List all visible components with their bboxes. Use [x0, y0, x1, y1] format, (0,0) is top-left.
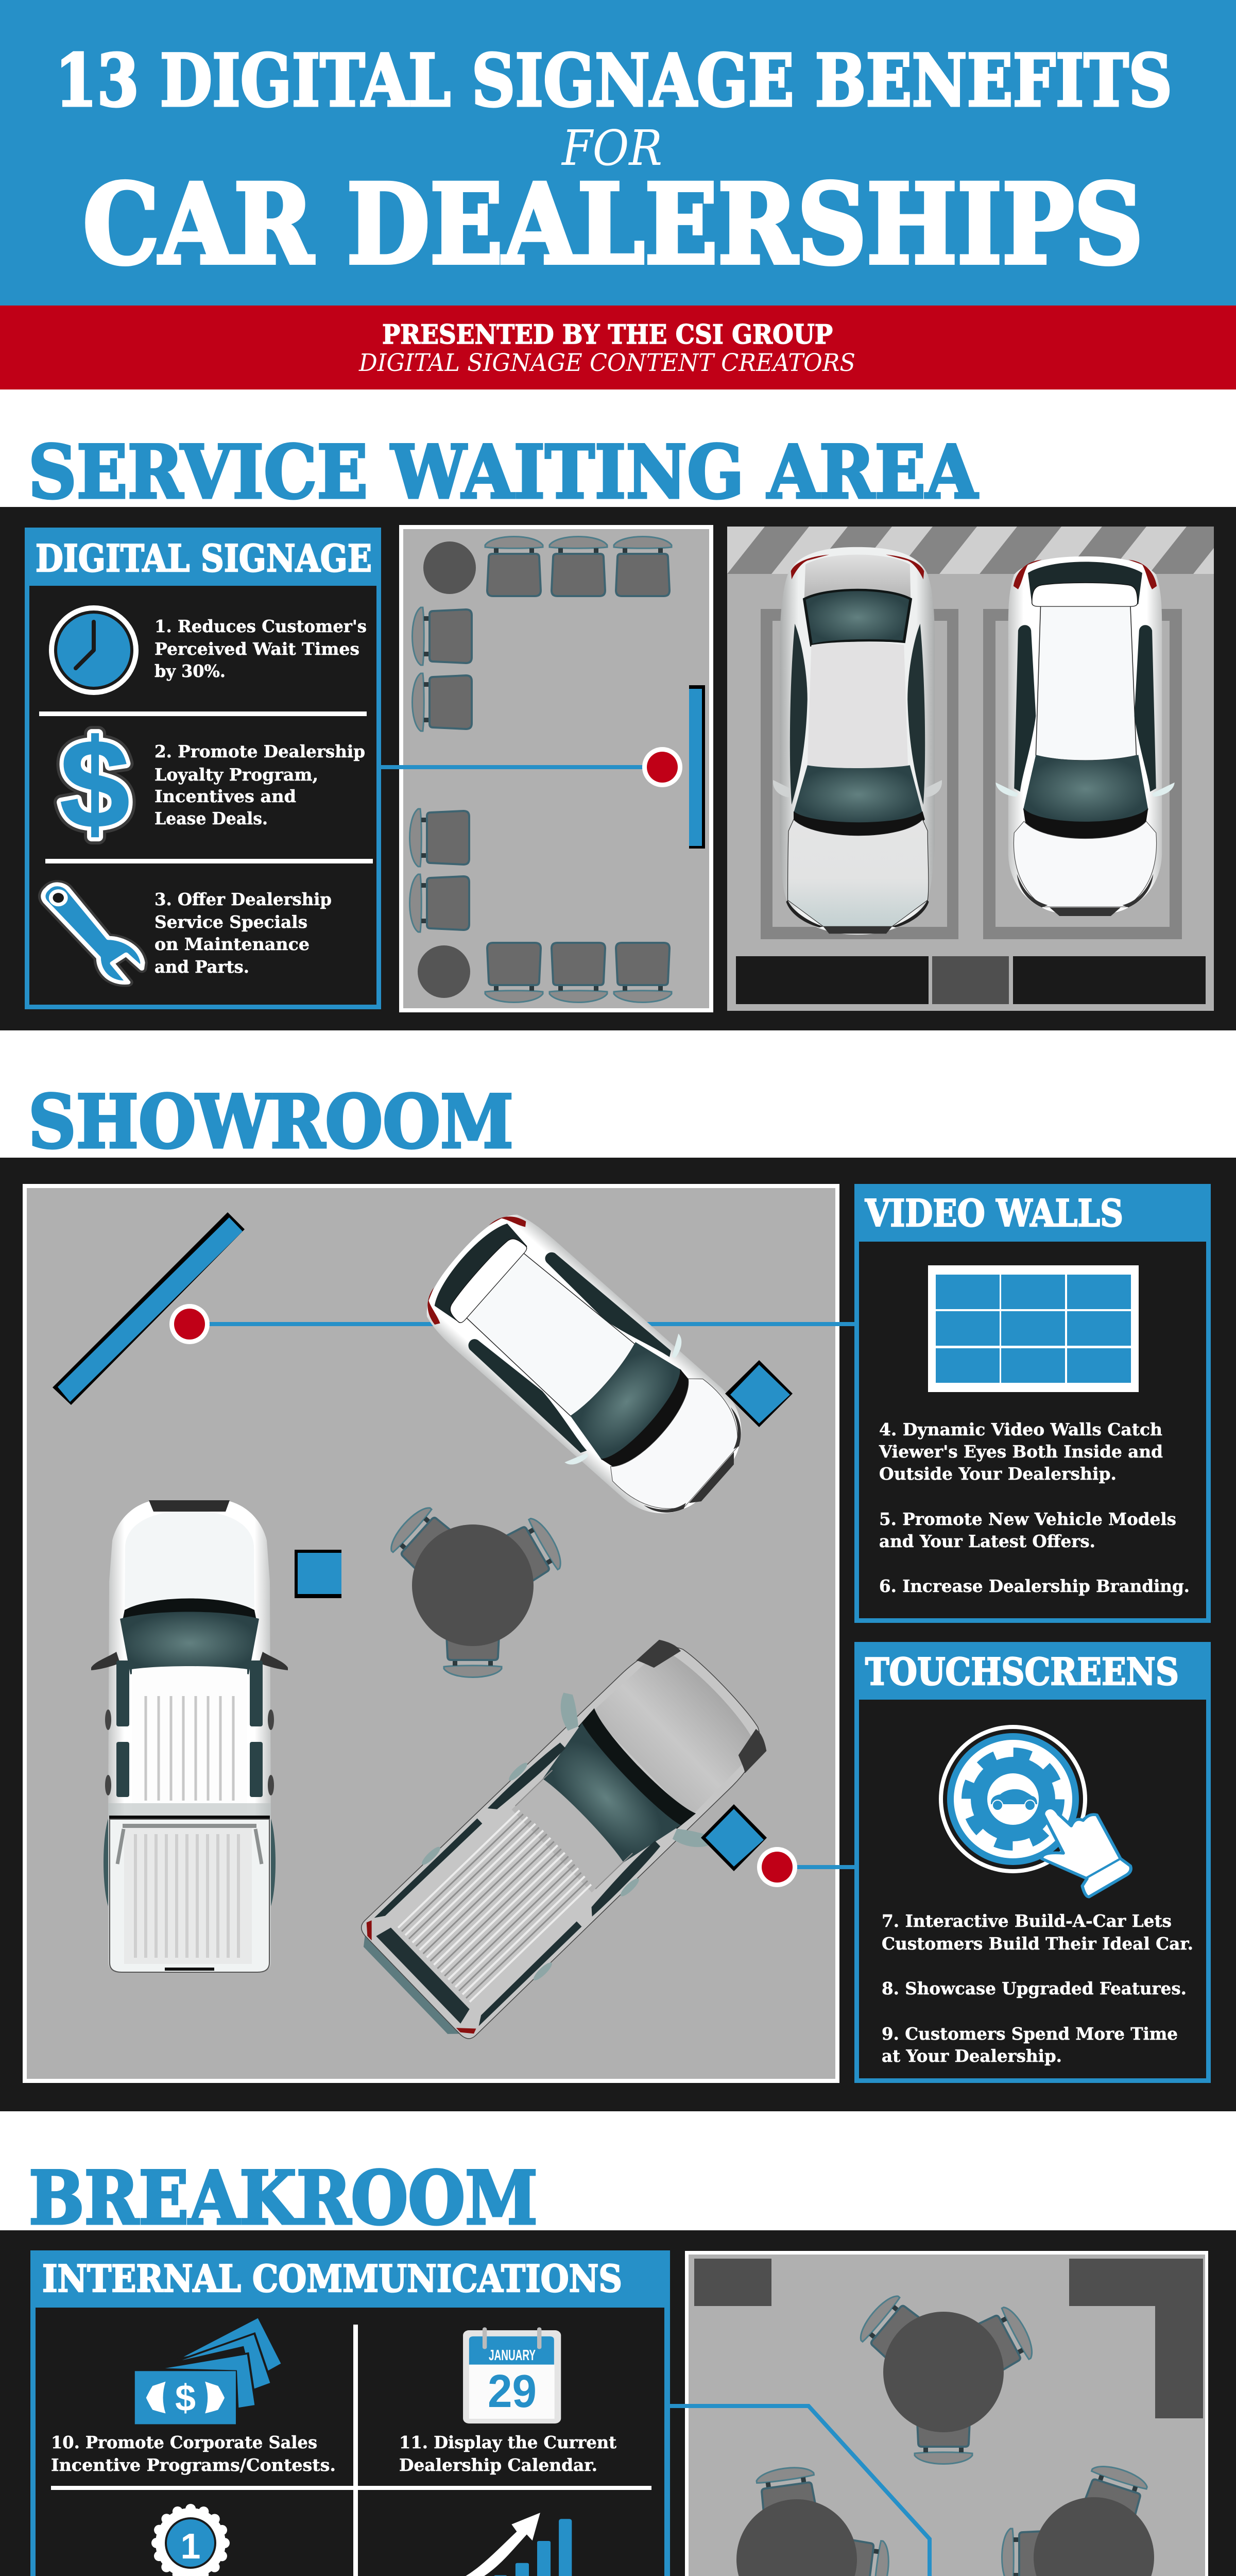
icon: calendar: JANUARY	[489, 2347, 536, 2364]
icon: dollar sign: $	[60, 713, 130, 854]
icon: calendar	[463, 2327, 561, 2424]
icon: ribbon: 1	[181, 2526, 200, 2566]
pickup truck	[91, 1500, 288, 1973]
presenter banner	[0, 306, 1236, 389]
benefit 10	[51, 2432, 336, 2475]
icon: calendar: 29	[488, 2366, 537, 2417]
benefit 1: 1. Reduces Customer's	[154, 616, 367, 636]
benefit 11: Dealership Calendar.	[399, 2455, 597, 2475]
benefit 2	[154, 741, 365, 828]
icon: ribbon	[156, 2508, 226, 2576]
location marker	[169, 1304, 210, 1344]
chairs	[410, 537, 672, 1003]
heading: showroom: SHOWROOM	[28, 1079, 513, 1165]
counter blocks	[736, 956, 1206, 1004]
benefit 11	[399, 2432, 617, 2475]
car: sedan	[773, 547, 942, 935]
benefit 7: 7. Interactive Build-A-Car Lets	[882, 1911, 1172, 1931]
benefit 2: Incentives and	[154, 786, 296, 806]
benefit 9	[882, 2024, 1178, 2066]
icon: video wall grid	[928, 1265, 1139, 1392]
table with chairs	[854, 2291, 1038, 2464]
table with chairs	[1002, 2461, 1177, 2576]
icon: dollar sign: $	[60, 713, 130, 854]
title word: for: FOR	[561, 120, 662, 177]
benefit 10: 10. Promote Corporate Sales	[51, 2432, 317, 2452]
connector line: touchscreen	[777, 1865, 854, 1869]
parking bay frames	[761, 609, 1182, 939]
icon: money	[135, 2317, 282, 2424]
connector line	[381, 765, 662, 769]
panel: parking bays	[727, 527, 1231, 1011]
heading: breakroom: BREAKROOM	[29, 2156, 538, 2241]
icon: touch gear	[939, 1725, 1131, 1897]
touchscreen kiosk	[701, 1804, 767, 1871]
icon: clock	[49, 605, 139, 695]
table with chairs	[385, 1502, 567, 1677]
location marker	[757, 1847, 797, 1887]
benefit 3: Service Specials	[154, 912, 307, 932]
corner counter	[1069, 2259, 1203, 2418]
benefit 1: Perceived Wait Times	[154, 639, 359, 659]
benefit 9: 9. Customers Spend More Time	[882, 2024, 1178, 2044]
pickup truck angled	[333, 1609, 796, 2067]
counter	[694, 2259, 771, 2306]
section: service waiting area	[0, 507, 1236, 1030]
icon: dollar sign: $	[60, 713, 130, 854]
panel: digital signage	[25, 528, 381, 1009]
heading: service waiting area: SERVICE WAITING AREA	[28, 430, 978, 515]
benefit 2: Loyalty Program,	[154, 765, 318, 785]
hazard stripes	[727, 527, 1231, 574]
benefit 3: and Parts.	[154, 957, 249, 977]
car: hatchback	[995, 556, 1175, 916]
icon: wrench	[43, 884, 143, 982]
icon: growth chart	[429, 2513, 572, 2576]
benefit 3	[154, 889, 332, 977]
icon: money: $	[175, 2378, 196, 2419]
kiosk screen	[725, 1360, 793, 1427]
benefit 9: at Your Dealership.	[882, 2046, 1062, 2066]
title banner	[0, 0, 1236, 306]
kiosk screen	[295, 1550, 341, 1598]
location marker	[642, 747, 682, 787]
benefit 1	[154, 616, 367, 681]
benefit 2: 2. Promote Dealership	[154, 741, 365, 761]
benefit 2: Lease Deals.	[154, 808, 268, 828]
benefit 8: 8. Showcase Upgraded Features.	[882, 1978, 1187, 1998]
panel heading: DIGITAL SIGNAGE	[36, 536, 372, 580]
connector line: video wall	[190, 1322, 854, 1326]
panel heading: VIDEO WALLS	[865, 1191, 1123, 1235]
benefit 1: by 30%.	[154, 661, 226, 681]
video wall screen	[53, 1212, 245, 1405]
panel: showroom floor plan	[23, 1184, 854, 2083]
benefit 6: 6. Increase Dealership Branding.	[879, 1576, 1190, 1596]
panel: video walls	[854, 1184, 1211, 1623]
panel: waiting room floor plan	[399, 525, 713, 1012]
table with chairs	[714, 2464, 891, 2576]
panel heading: TOUCHSCREENS	[865, 1650, 1179, 1693]
benefit 5	[879, 1509, 1176, 1551]
benefit 7: Customers Build Their Ideal Car.	[882, 1934, 1193, 1954]
digital sign screen	[689, 685, 705, 849]
benefit 4	[879, 1419, 1163, 1484]
benefit 3: on Maintenance	[154, 934, 310, 954]
subtitle: DIGITAL SIGNAGE CONTENT CREATORS	[358, 349, 855, 377]
benefit 5: 5. Promote New Vehicle Models	[879, 1509, 1176, 1529]
panel: breakroom floor plan	[670, 2251, 1208, 2576]
side tables	[418, 541, 476, 998]
benefit 3: 3. Offer Dealership	[154, 889, 332, 909]
benefit 5: and Your Latest Offers.	[879, 1531, 1095, 1551]
section: showroom	[0, 1158, 1236, 2111]
benefit 4: Outside Your Dealership.	[879, 1464, 1117, 1484]
panel: internal communications	[30, 2250, 670, 2576]
benefit 4: Viewer's Eyes Both Inside and	[879, 1442, 1163, 1462]
section: breakroom	[0, 2230, 1236, 2576]
presented by: PRESENTED BY THE CSI GROUP	[382, 319, 833, 350]
benefit 10: Incentive Programs/Contests.	[51, 2455, 336, 2475]
panel: touchscreens	[854, 1642, 1211, 2083]
connector line	[670, 2406, 930, 2576]
benefit 4: 4. Dynamic Video Walls Catch	[879, 1419, 1162, 1439]
car: hatchback angled	[402, 1190, 775, 1547]
benefit 11: 11. Display the Current	[399, 2432, 617, 2452]
benefit 7	[882, 1911, 1193, 1954]
panel heading: INTERNAL COMMUNICATIONS	[42, 2257, 622, 2300]
